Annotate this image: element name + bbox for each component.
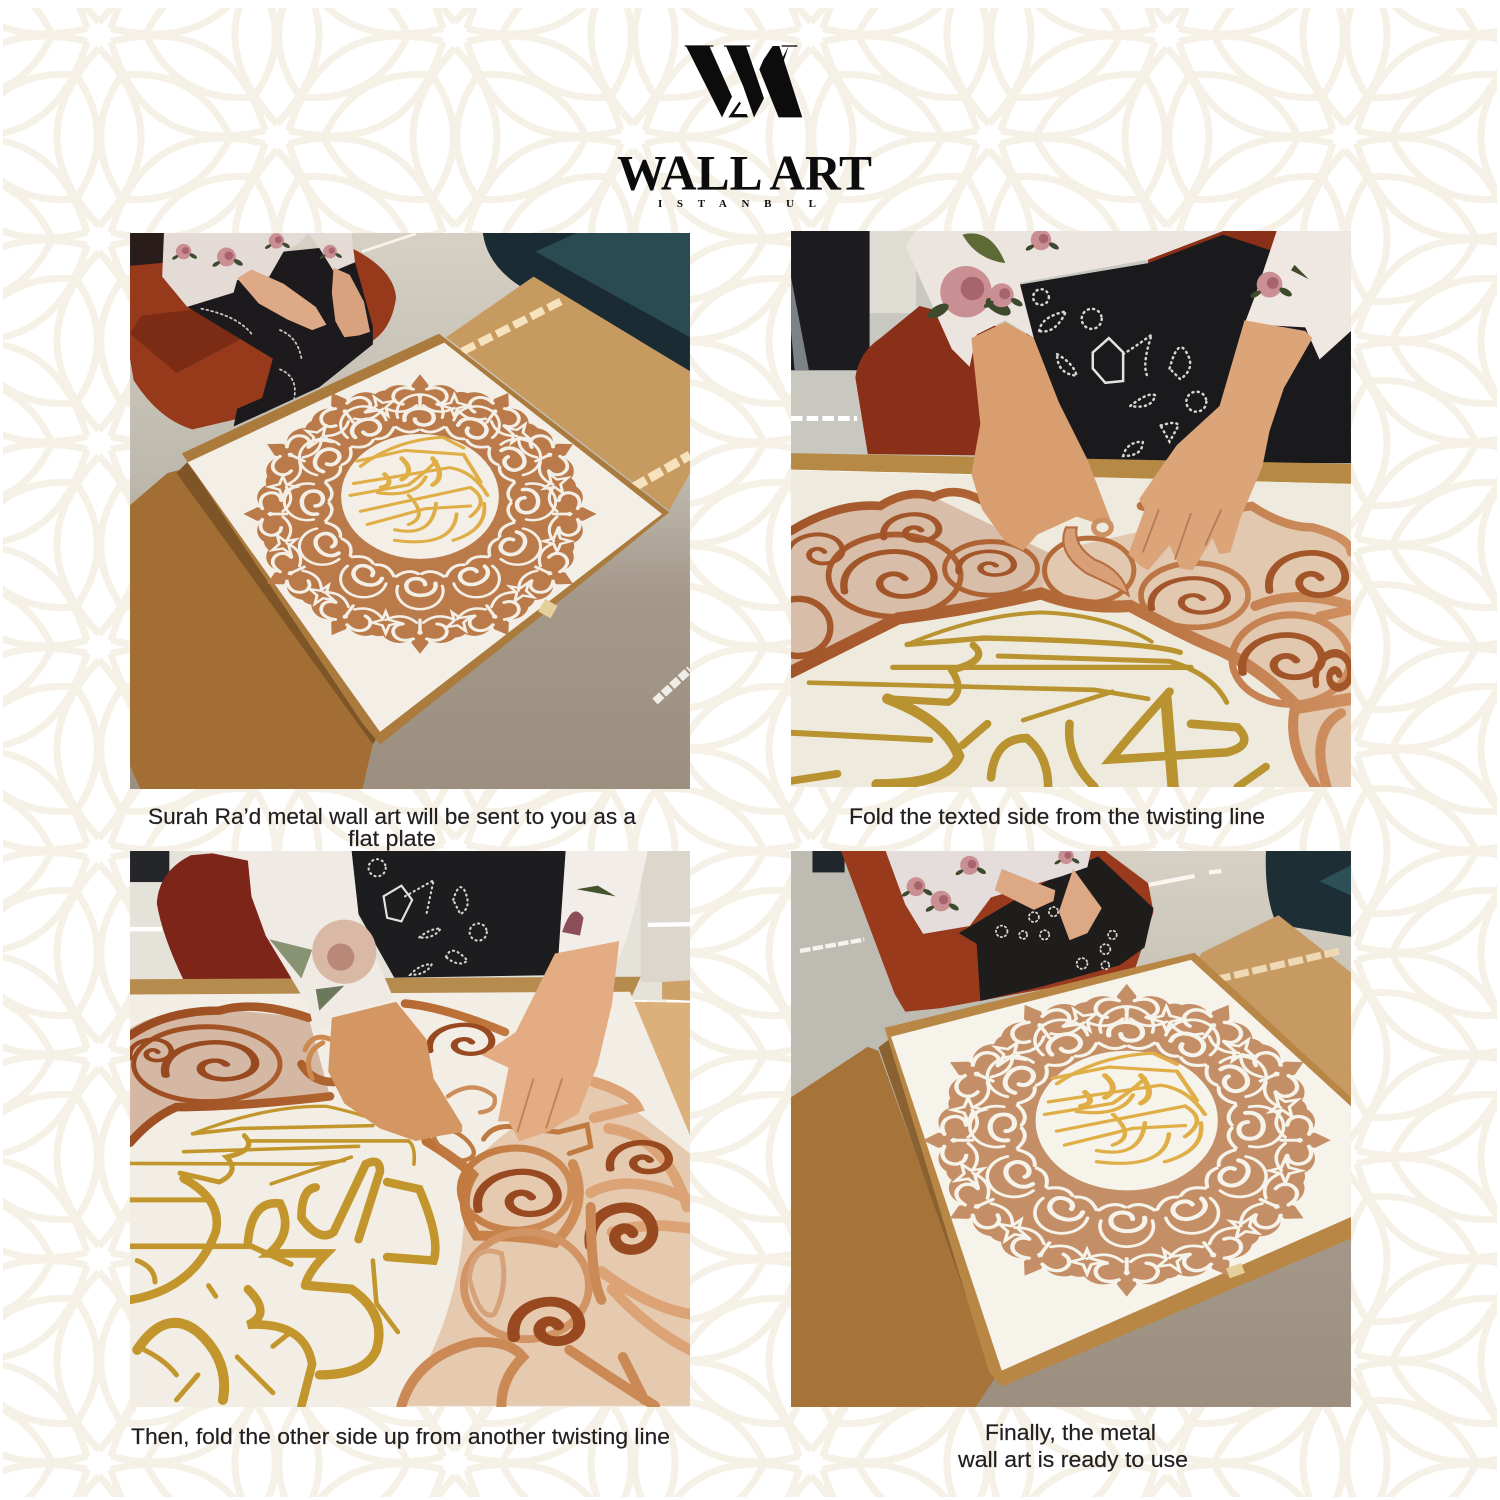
- caption 2: Fold the texted side from the twisting line: [849, 804, 1265, 829]
- sofa: [1266, 851, 1351, 937]
- hands: [328, 1002, 462, 1141]
- right flap: [1195, 915, 1351, 1122]
- caption 1: Surah Ra’d metal wall art will be sent to you as a: [148, 804, 636, 829]
- seated figure: [162, 233, 373, 427]
- hands: [995, 869, 1055, 910]
- hands: [237, 269, 326, 330]
- box frame: [182, 334, 669, 744]
- shirt: [905, 231, 1223, 367]
- left flap: [130, 469, 373, 790]
- caption 4: Finally, the metal: [985, 1420, 1156, 1445]
- caption 3: Then, fold the other side up from another twisting line: [131, 1424, 670, 1449]
- gold calligraphy: [130, 1106, 435, 1406]
- shirt: [196, 850, 394, 1036]
- logo subline: ISTANBUL: [658, 198, 816, 210]
- box frame: [885, 953, 1351, 1387]
- jeans: [1020, 235, 1351, 463]
- curtain: [791, 231, 870, 370]
- foam: [891, 960, 1351, 1371]
- hands: [971, 322, 1111, 551]
- logo wordmark: WALL ART: [617, 144, 872, 200]
- right flap: [446, 277, 690, 510]
- photo 2: folding texted side: [791, 231, 1351, 787]
- chair: [157, 850, 309, 980]
- caption 1: [148, 804, 636, 851]
- calligraphy: [350, 437, 487, 542]
- logo: Wall Art Istanbul: [617, 45, 872, 210]
- sofa: [483, 233, 690, 371]
- foam: [188, 343, 662, 732]
- chair: [841, 851, 1153, 1012]
- chair: [130, 248, 396, 429]
- seated figure: [886, 849, 1153, 1001]
- icon: monogram mark: [685, 45, 802, 117]
- mandala: [240, 371, 600, 657]
- caption 4: wall art is ready to use: [957, 1447, 1188, 1472]
- foam: [791, 470, 1351, 787]
- foam: [130, 992, 690, 1407]
- mandala: [918, 981, 1335, 1300]
- copper lace: [766, 490, 1351, 787]
- left flap: [791, 1047, 996, 1411]
- copper lace: [130, 1003, 690, 1406]
- gold calligraphy: [791, 612, 1266, 787]
- chair: [855, 306, 1041, 456]
- box lip and flap: [130, 977, 641, 1001]
- caption 4: [957, 1420, 1188, 1472]
- calligraphy: [1045, 1053, 1205, 1163]
- jeans: [351, 850, 569, 978]
- box lip: [791, 453, 1351, 484]
- photo 1: boxed wall art, flat plate: [130, 233, 690, 789]
- photo 3: folding other side: [130, 851, 690, 1407]
- photo 4: finished wall art in box: [791, 851, 1351, 1407]
- caption 1: flat plate: [348, 826, 436, 851]
